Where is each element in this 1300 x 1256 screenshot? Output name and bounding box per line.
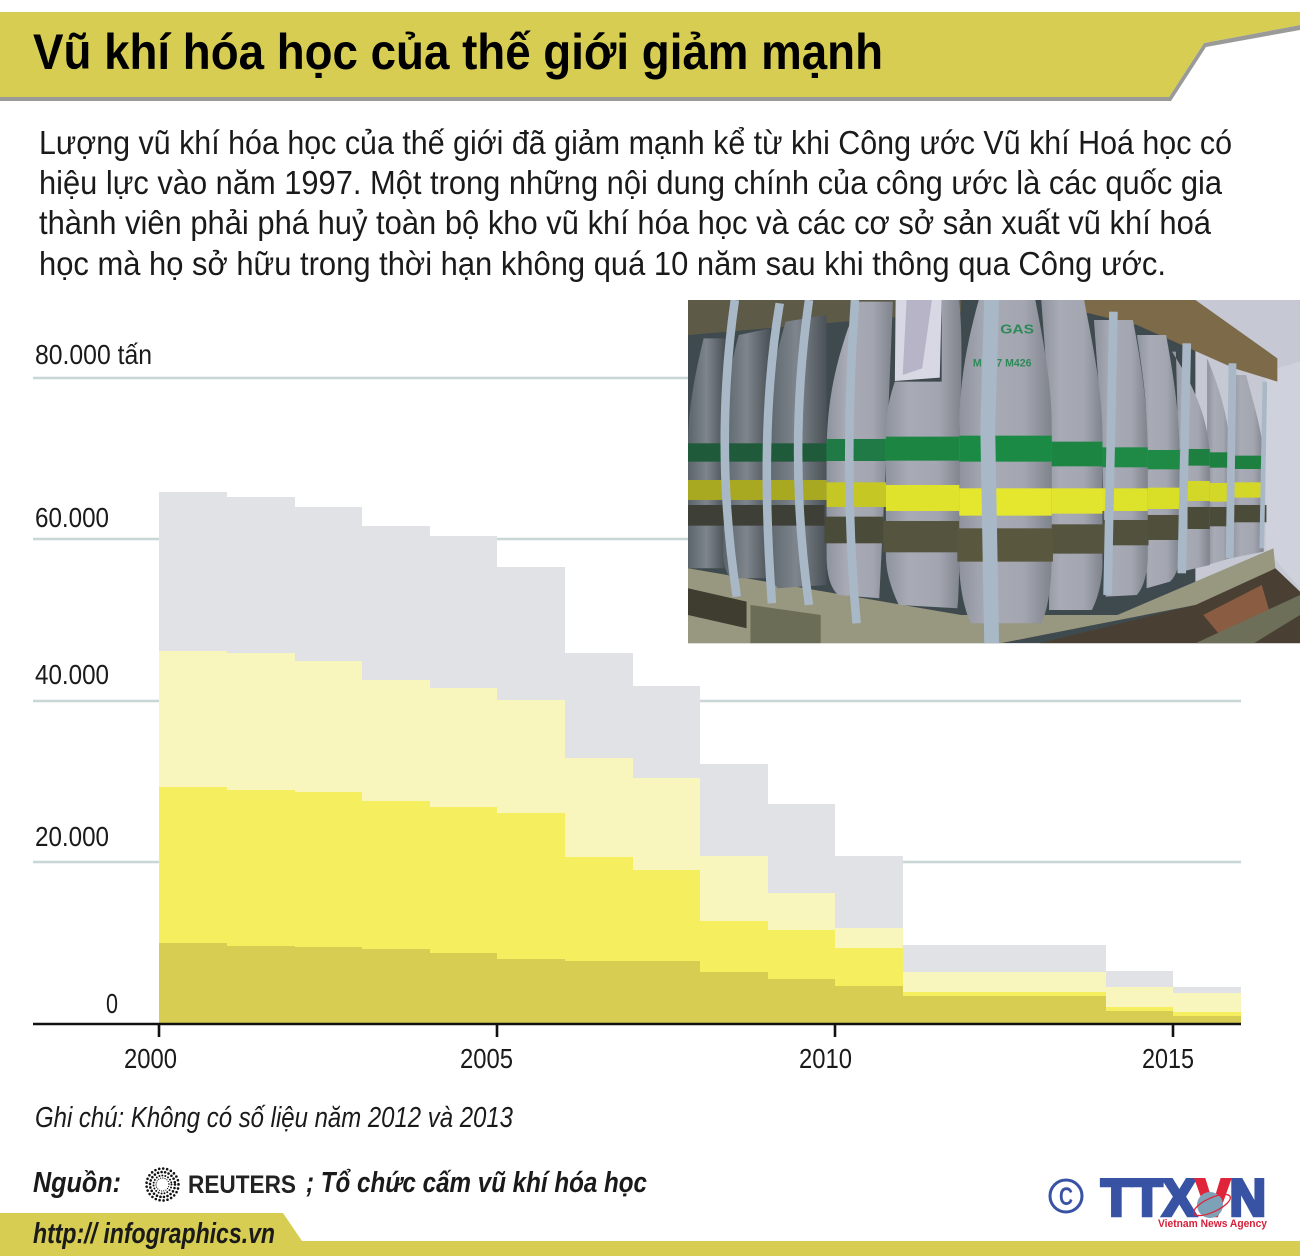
footer band [0, 1213, 1300, 1256]
y axis labels: 40.000 [35, 659, 109, 690]
shell 9 [1137, 335, 1180, 588]
shell 6 [959, 300, 1052, 623]
x axis labels: 2005 [460, 1043, 513, 1074]
steel straps [725, 300, 1265, 643]
grid lines [33, 378, 1241, 862]
x axis [33, 1024, 1241, 1037]
website url: http:// infographics.vn [33, 1218, 275, 1250]
intro paragraph: thành viên phải phá huỷ toàn bộ kho vũ khí hóa học và các cơ sở sản xuất vũ khí hoá [39, 204, 1212, 241]
x axis labels: 2010 [799, 1043, 852, 1074]
x axis labels [124, 1043, 1194, 1074]
shell markings: GAS [1000, 322, 1034, 337]
copyright symbol: C [1059, 1183, 1073, 1211]
x axis labels: 2015 [1142, 1043, 1194, 1074]
title banner [0, 12, 1300, 101]
TTXVN wordmark: TTXVN [1101, 1170, 1266, 1228]
Reuters wordmark: REUTERS [188, 1171, 296, 1199]
second source: ; Tổ chức cấm vũ khí hóa học [306, 1167, 647, 1199]
intro paragraph: Lượng vũ khí hóa học của thế giới đã giảm mạnh kể từ khi Công ước Vũ khí Hoá học có [39, 124, 1232, 161]
area: bright yellow layer [159, 787, 1241, 1024]
shell 13-10 far right [1172, 352, 1266, 572]
paper tag [895, 300, 942, 381]
shell 5 [886, 300, 962, 608]
shell 4 [827, 302, 893, 598]
intro paragraph [39, 124, 1232, 282]
y axis labels: 0 [106, 988, 118, 1019]
globe with orbit [1191, 1190, 1233, 1220]
shell 7 [1041, 300, 1102, 610]
y axis labels: 20.000 [35, 821, 109, 852]
source label: Nguồn: [33, 1167, 121, 1199]
photo: chemical shells on pallet [688, 300, 1300, 643]
shell group left dark [688, 315, 827, 588]
shell 8 [1094, 320, 1148, 597]
note: Ghi chú: Không có số liệu năm 2012 và 2013 [35, 1102, 513, 1134]
agency name: Vietnam News Agency [1158, 1218, 1268, 1230]
area: olive layer [159, 943, 1241, 1024]
shell markings [974, 324, 1034, 366]
intro paragraph: hiệu lực vào năm 1997. Một trong những nội dung chính của công ước là các quốc gia [39, 164, 1223, 201]
chart: chemical weapons stockpile by year [33, 339, 1241, 1074]
y axis labels: 60.000 [35, 502, 109, 533]
logo: TTXVN [1050, 1170, 1268, 1230]
source line [33, 1167, 647, 1200]
intro paragraph: học mà họ sở hữu trong thời hạn không quá 10 năm sau khi thông qua Công ước. [39, 245, 1166, 282]
area: pale yellow layer [159, 651, 1241, 1024]
copyright symbol [1050, 1180, 1082, 1212]
title: Vũ khí hóa học của thế giới giảm mạnh [33, 24, 883, 80]
y axis labels: 80.000 tấn [35, 339, 152, 370]
shell markings: M 687 M426 [973, 357, 1032, 369]
x axis labels: 2000 [124, 1043, 177, 1074]
area: grey layer [159, 492, 1241, 1024]
y axis labels [35, 339, 152, 1019]
icon: Reuters dotted ring [146, 1168, 178, 1200]
